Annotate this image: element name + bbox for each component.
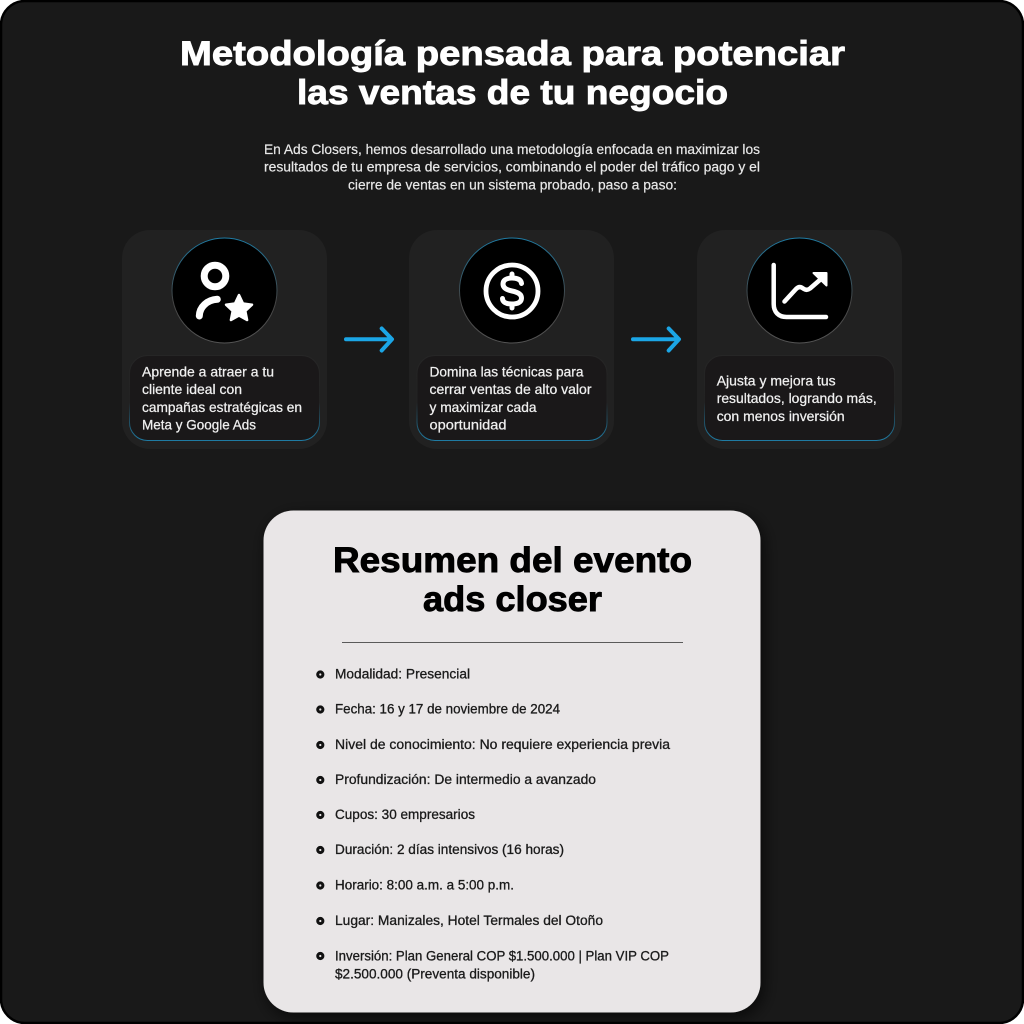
bullet list: Duración: 2 días intensivos (16 horas) <box>335 842 564 857</box>
bullet list: Horario: 8:00 a.m. a 5:00 p.m. <box>335 878 514 892</box>
text box: step 3: resultados, logrando más, <box>717 390 877 406</box>
bullet list: Fecha: 16 y 17 de noviembre de 2024 <box>335 702 560 716</box>
title <box>180 35 845 112</box>
panel: event summary <box>264 510 760 1012</box>
bullet list: Cupos: 30 empresarios <box>335 807 475 822</box>
bullet list <box>318 666 671 981</box>
panel: step 3 <box>697 230 902 449</box>
intro text: resultados de tu empresa de servicios, combinando el poder del tráfico pago y el <box>264 160 760 175</box>
title: las ventas de tu negocio <box>297 74 728 112</box>
panel: step 1 <box>122 230 327 449</box>
panel: step 2 <box>409 230 614 449</box>
text box: step 3 <box>704 356 894 440</box>
bullet list: Profundización: De intermedio a avanzado <box>335 772 596 787</box>
arrow: step 2 to step 3 <box>633 328 679 350</box>
text box: step 2: y maximizar cada <box>430 399 537 415</box>
text box: step 3: Ajusta y mejora tus <box>717 372 836 388</box>
intro text: En Ads Closers, hemos desarrollado una metodología enfocada en maximizar los <box>264 142 760 157</box>
summary heading: Resumen del evento <box>333 541 692 580</box>
arrow: step 1 to step 2 <box>346 328 392 350</box>
summary heading: ads closer <box>423 580 602 619</box>
icon: dollar coin <box>460 238 564 343</box>
icon: person with star <box>172 238 277 343</box>
text box: step 1: campañas estratégicas en <box>142 399 302 415</box>
text box: step 2: Domina las técnicas para <box>430 364 584 380</box>
icon: growth chart <box>747 238 852 343</box>
text box: step 1 <box>130 356 320 440</box>
text box: step 3: con menos inversión <box>717 408 845 424</box>
text box: step 1: cliente ideal con <box>142 381 242 397</box>
bullet list: $2.500.000 (Preventa disponible) <box>335 966 535 981</box>
bullet list: Modalidad: Presencial <box>335 666 470 682</box>
bullet list: Nivel de conocimiento: No requiere experiencia previa <box>335 737 671 752</box>
text box: step 1: Meta y Google Ads <box>142 416 256 432</box>
text box: step 2: oportunidad <box>430 416 506 432</box>
summary heading <box>333 541 692 619</box>
text box: step 2 <box>417 356 607 440</box>
intro text <box>264 142 760 192</box>
bullet list: Inversión: Plan General COP $1.500.000 | Plan VIP COP <box>335 948 669 964</box>
title: Metodología pensada para potenciar <box>180 35 845 73</box>
intro text: cierre de ventas en un sistema probado, paso a paso: <box>348 177 677 192</box>
text box: step 1: Aprende a atraer a tu <box>142 364 274 380</box>
text box: step 2: cerrar ventas de alto valor <box>430 381 592 397</box>
bullet list: Lugar: Manizales, Hotel Termales del Otoño <box>335 913 603 928</box>
